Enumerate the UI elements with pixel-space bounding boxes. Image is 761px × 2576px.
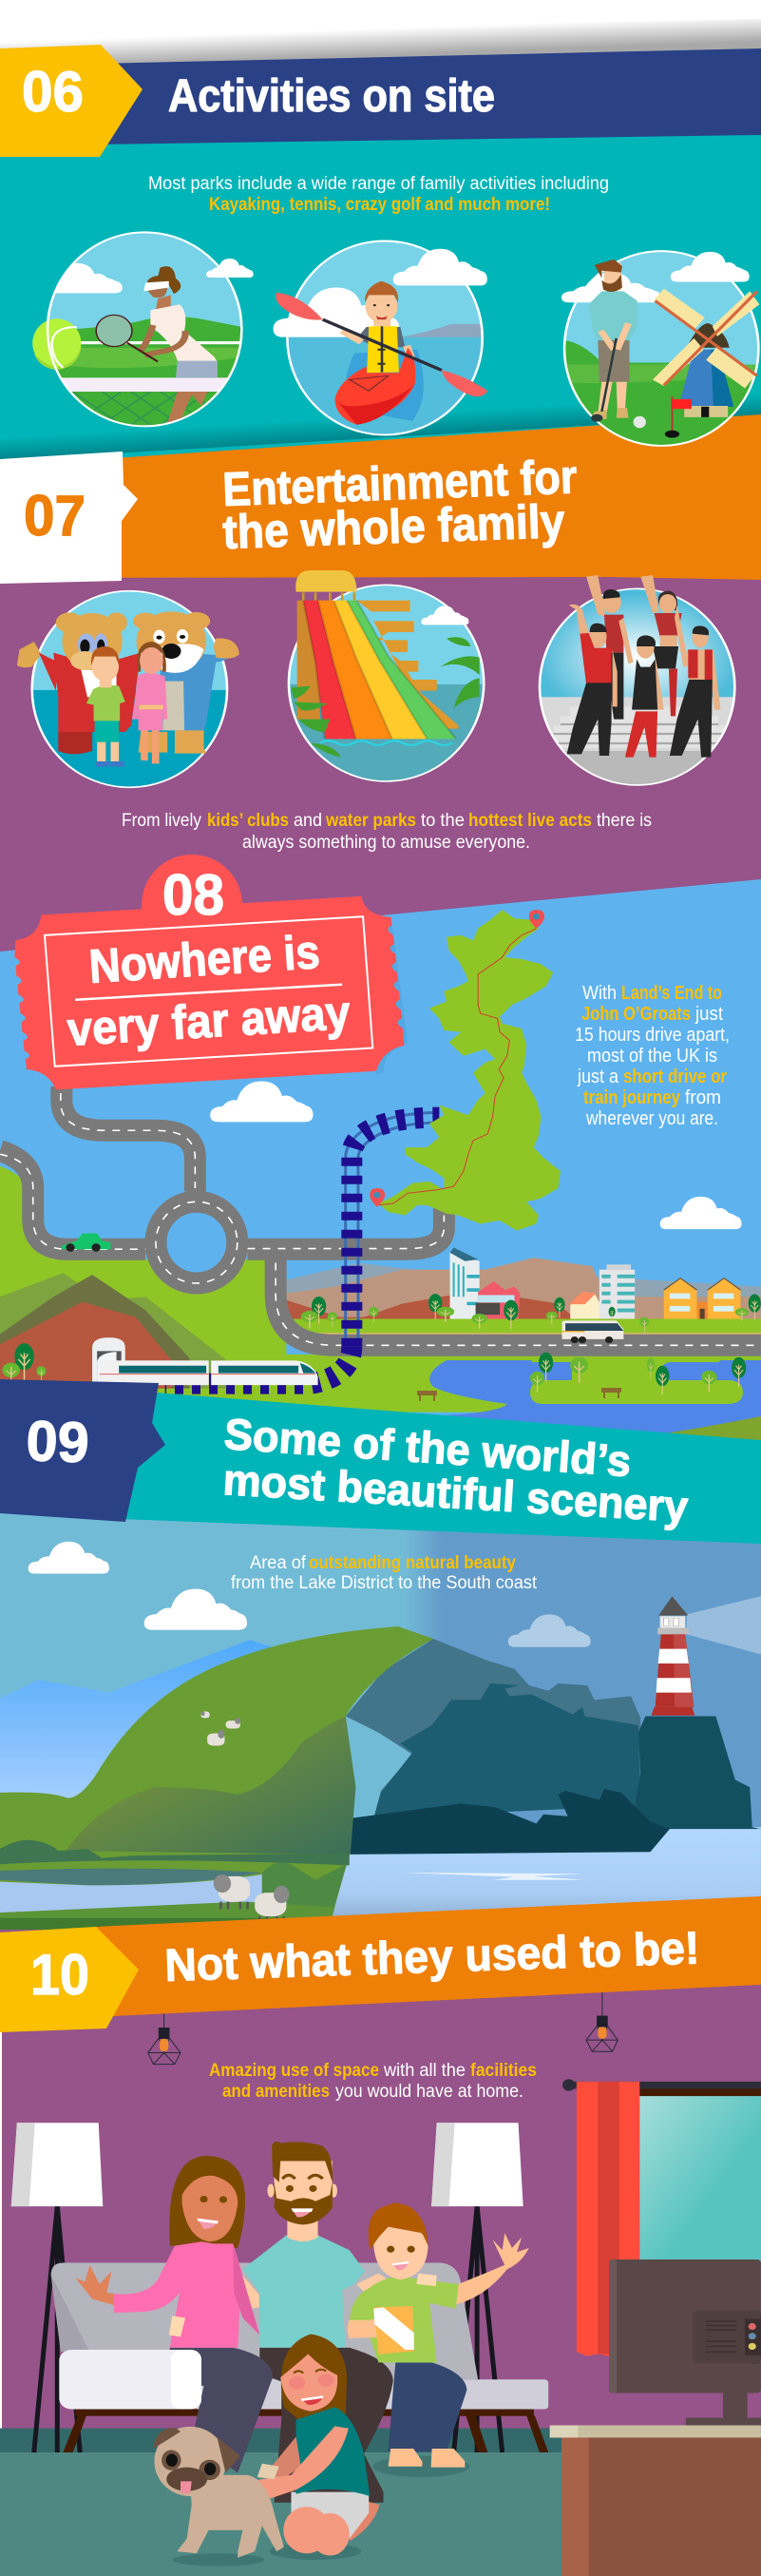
number tag 10 (0, 1927, 139, 2032)
text: distance description: short drive or (623, 1067, 727, 1087)
sheep (200, 1712, 289, 1921)
pendant lamps (148, 1991, 618, 2065)
intro text 06: Kayaking, tennis, crazy golf and much more! (209, 195, 550, 215)
text: home description: Amazing use of space (209, 2061, 379, 2081)
pug (153, 2427, 284, 2566)
heading: most beautiful scenery (221, 1409, 690, 1531)
heading: Not what they used to be: Not what they used to be! (164, 1923, 700, 1991)
dancer back right (640, 575, 689, 716)
text: distance description: With (582, 983, 617, 1004)
heading: Entertainment for the whole family: Entertainment for (221, 450, 578, 516)
UK map (378, 910, 561, 1231)
text: distance description (575, 983, 730, 1129)
sofa cushion (59, 2350, 201, 2410)
TV (609, 2259, 761, 2426)
text: home description: with all the (383, 2061, 466, 2081)
illustration: live act dancers circle (539, 575, 737, 786)
panel: 10 living room (0, 1896, 761, 2576)
number tag 07: 07 (24, 484, 86, 548)
golf flag and ball (634, 396, 692, 438)
palm leaves (291, 637, 480, 758)
panel: 08 map scene (0, 855, 761, 1454)
number tag 07 (0, 452, 138, 584)
text: entertainment description: to the (421, 811, 465, 831)
green headlands (0, 1626, 433, 1940)
boy (348, 2202, 529, 2477)
cliffs (346, 1639, 761, 1855)
text: entertainment description: From lively (122, 811, 201, 831)
tiger mascot (133, 611, 239, 754)
illustration: golfer and windmill circle (561, 250, 761, 448)
blue mountains (0, 1640, 301, 1805)
bullet train (97, 1352, 318, 1385)
heading: Entertainment for the whole family: the whole family (222, 494, 565, 559)
text: entertainment description: and (294, 811, 322, 831)
text: distance description: train journey (583, 1087, 681, 1108)
location pins (370, 910, 544, 1207)
heading: most beautiful scenery: most beautiful scenery (221, 1454, 690, 1531)
text: entertainment description: kids’ clubs (207, 811, 289, 831)
number tag 09 (0, 1379, 165, 1522)
text: scenery description: outstanding natural beauty (309, 1553, 516, 1573)
text: entertainment description: hottest live acts (468, 811, 592, 831)
text: scenery description (231, 1553, 538, 1593)
tennis ball (32, 318, 81, 370)
text: entertainment description (122, 811, 652, 853)
floor (0, 2429, 761, 2576)
text: entertainment description: there is (597, 811, 652, 831)
dancer right man (670, 625, 721, 758)
illustration: water slide circle (286, 570, 487, 782)
text: distance description: most of the UK is (587, 1046, 717, 1067)
number 08: 08 (162, 863, 224, 927)
window and curtain (562, 2079, 761, 2356)
sofa (51, 2263, 548, 2452)
number tag 09: 09 (26, 1409, 90, 1474)
illustration: kayaker circle (274, 240, 487, 436)
teal banner (95, 1388, 761, 1544)
ticket heading: Nowhere is (87, 925, 321, 993)
text: distance description: just (694, 1004, 723, 1025)
number tag 10: 10 (30, 1943, 89, 2007)
slide lanes (303, 601, 456, 739)
illustration: tennis player circle (29, 229, 254, 429)
slide tower and stairs (297, 601, 459, 729)
orange banner (0, 1896, 761, 2025)
ticket heading: very far away (66, 986, 352, 1056)
text: home description: facilities (470, 2061, 537, 2081)
coach (562, 1320, 623, 1343)
text: entertainment description: always something to amuse everyone. (242, 833, 530, 853)
text: scenery description: Area of (250, 1553, 307, 1573)
illustration: kids club mascots circle (17, 589, 239, 788)
green ground (0, 1166, 761, 1413)
text: distance description: just a (577, 1067, 619, 1087)
floor lamps (11, 2123, 523, 2452)
left hill with tunnel (0, 1273, 228, 1389)
girl (231, 2335, 379, 2560)
map scene artwork (0, 910, 761, 1413)
intro text 06 (148, 174, 609, 215)
water (0, 1827, 761, 1936)
route line (378, 929, 536, 1205)
TV cabinet (550, 2425, 761, 2576)
text: home description: you would have at home. (335, 2082, 523, 2102)
tennis player (96, 266, 218, 377)
number tag 06 (0, 45, 143, 157)
trees (3, 1294, 761, 1385)
heading: Activities on site: Activities on site (168, 71, 495, 122)
ticket: nowhere is very far away (14, 855, 408, 1089)
windmill (653, 289, 759, 417)
clouds (210, 1081, 742, 1229)
panel: 06 header and teal background (0, 19, 761, 475)
slide canopy (295, 570, 356, 601)
kayaker and kayak (276, 281, 487, 425)
dancer back left (586, 575, 623, 720)
car (62, 1233, 110, 1252)
roads (0, 1086, 761, 1345)
distant mountains (286, 1258, 761, 1320)
mum (75, 2156, 273, 2472)
boy (86, 646, 125, 767)
clouds (29, 1542, 591, 1647)
panel: 09 scenery (0, 1353, 761, 1949)
town buildings (450, 1247, 740, 1318)
dad (230, 2142, 393, 2503)
bear mascot (17, 612, 141, 754)
lake and island above banner (380, 1353, 761, 1454)
text: distance description: wherever you are. (585, 1108, 718, 1129)
railway track (165, 1112, 439, 1384)
girl (132, 642, 167, 763)
text: entertainment description: water parks (325, 811, 416, 831)
heading: most beautiful scenery: Some of the world’s (222, 1409, 633, 1486)
benches (417, 1388, 621, 1401)
text: home description: and amenities (222, 2082, 330, 2102)
golfer (589, 260, 637, 422)
dancer left man in hat (567, 605, 618, 756)
text: distance description: from (685, 1087, 721, 1108)
text: scenery description: from the Lake District to the South coast (231, 1573, 538, 1593)
heading: Entertainment for the whole family (221, 450, 578, 559)
ticket shape (14, 896, 408, 1089)
panel: 07 background, orange banner and heading (0, 394, 761, 960)
ticket heading (66, 925, 352, 1056)
text: distance description: 15 hours drive apart, (575, 1025, 730, 1046)
intro text 06: Most parks include a wide range of family activities including (148, 174, 609, 194)
scenery artwork (0, 1542, 761, 1940)
number tag 06: 06 (22, 60, 84, 124)
lighthouse (651, 1596, 761, 1716)
dancer front woman (618, 618, 664, 758)
text: distance description: Land’s End to (621, 983, 722, 1004)
text: distance description: John O’Groats (581, 1004, 691, 1025)
text: home description (209, 2061, 537, 2102)
room artwork (0, 1991, 761, 2576)
